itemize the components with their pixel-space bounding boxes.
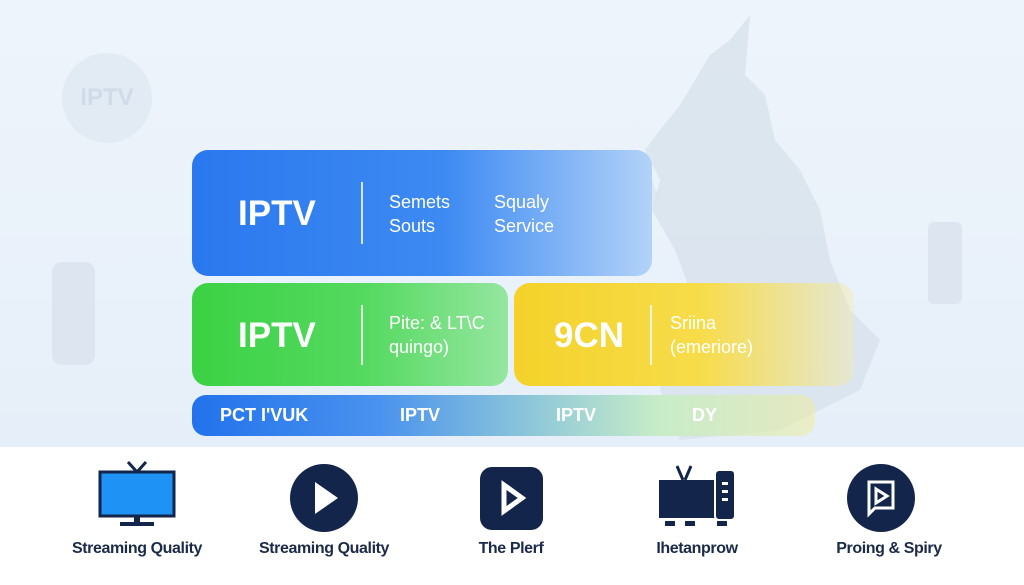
- label: Streaming Quality: [259, 540, 389, 557]
- text: [494, 192, 554, 236]
- label: Ihetanprow: [656, 540, 738, 557]
- panel: green: [192, 283, 508, 386]
- panel: yellow: [514, 283, 854, 386]
- bar: DY: [692, 405, 717, 425]
- badge: IPTV circle: IPTV: [80, 84, 134, 111]
- heading: IPTV: [238, 316, 316, 355]
- text: [389, 192, 450, 236]
- icon: play square: [480, 467, 543, 530]
- bar: IPTV: [556, 405, 596, 425]
- label: Proing & Spiry: [836, 540, 942, 557]
- text: Pite: & LT\C: [389, 313, 485, 333]
- label: The Plerf: [479, 540, 543, 557]
- icon: TV: [98, 461, 176, 526]
- bar: IPTV: [400, 405, 440, 425]
- text: Sriina: [670, 313, 716, 333]
- text: Souts: [389, 216, 435, 236]
- text: quingo): [389, 337, 449, 357]
- label: Streaming Quality: [72, 540, 202, 557]
- icon: remote left: [52, 262, 95, 365]
- map of UK: [640, 16, 880, 440]
- text: Squaly: [494, 192, 549, 212]
- panel: blue: [192, 150, 652, 276]
- bar: PCT I'VUK: [220, 405, 308, 425]
- icon: play chat circle: [847, 464, 915, 532]
- text: (emeriore): [670, 337, 753, 357]
- text: [670, 313, 753, 357]
- text: [389, 313, 485, 357]
- heading: 9CN: [554, 316, 624, 355]
- icon: TV box: [659, 465, 734, 526]
- bar: [192, 395, 815, 436]
- icon: remote right: [928, 222, 962, 304]
- badge: IPTV circle: [62, 53, 152, 143]
- background: [0, 0, 1024, 447]
- icon: play circle: [290, 464, 358, 532]
- heading: IPTV: [238, 194, 316, 233]
- text: Service: [494, 216, 554, 236]
- text: Semets: [389, 192, 450, 212]
